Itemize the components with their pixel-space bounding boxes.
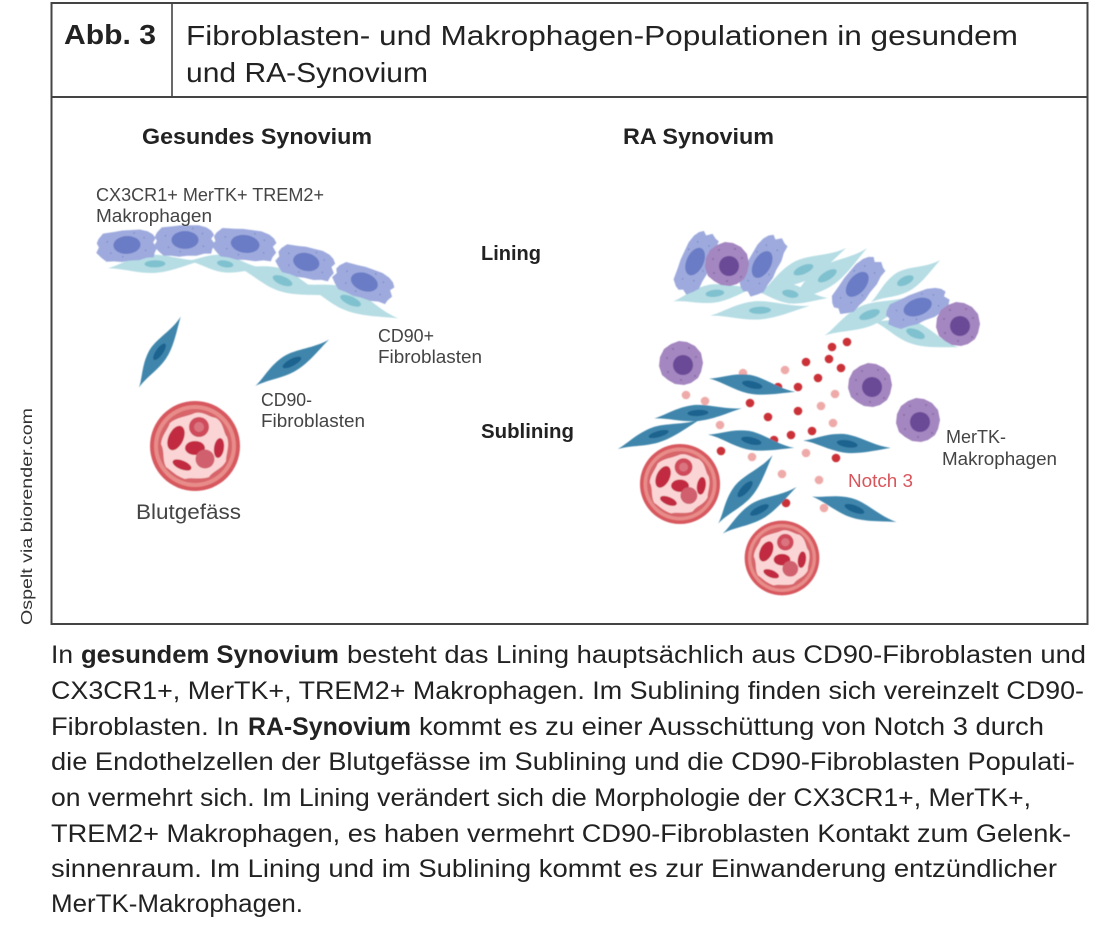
Notch 3 particles xyxy=(682,338,851,512)
body paragraph: sinnenraum. Im Lining und im Sublining kommt es zur Einwanderung entzündlicher xyxy=(51,856,1057,883)
label: CD90- fibroblasts: CD90- xyxy=(261,390,312,410)
body paragraph: In xyxy=(51,642,73,669)
label: CD90- fibroblasts: Fibroblasten xyxy=(261,411,365,431)
body paragraph: besteht das Lining hauptsächlich aus CD90-Fibroblasten und xyxy=(347,642,1086,669)
body paragraph: on vermehrt sich. Im Lining verändert sich die Morphologie der CX3CR1+, MerTK+, xyxy=(51,785,1031,812)
body paragraph: Fibroblasten. In xyxy=(51,714,239,741)
heading: RA synovium: RA Synovium xyxy=(623,124,774,149)
label: sublining: Sublining xyxy=(481,420,574,443)
figure frame xyxy=(51,3,1088,624)
healthy lining fibroblasts xyxy=(107,249,402,331)
body paragraph: kommt es zu einer Ausschüttung von Notch 3 durch xyxy=(419,714,1044,741)
MerTK- macrophages xyxy=(659,242,980,442)
body paragraph: RA-Synovium xyxy=(248,714,411,741)
RA sublining fibroblasts xyxy=(615,366,899,538)
label: CD90+ fibroblasts: CD90+ xyxy=(378,326,434,346)
RA lining macrophages xyxy=(668,226,954,334)
body paragraph: die Endothelzellen der Blutgefässe im Sublining und die CD90-Fibroblasten Populati- xyxy=(51,749,1075,776)
illustration: healthy synovium xyxy=(95,225,402,491)
label: CD90+ fibroblasts xyxy=(378,326,482,367)
RA blood vessels xyxy=(640,444,819,595)
RA lining fibroblasts xyxy=(672,241,961,361)
figure title: und RA-Synovium xyxy=(186,57,428,88)
label: CD90+ fibroblasts: Fibroblasten xyxy=(378,347,482,367)
healthy lining macrophages xyxy=(95,225,399,308)
label: CD90- fibroblasts xyxy=(261,390,365,431)
body paragraph xyxy=(51,642,1086,918)
label: Notch 3: Notch 3 xyxy=(848,470,913,491)
body paragraph: TREM2+ Makrophagen, es haben vermehrt CD90-Fibroblasten Kontakt zum Gelenk- xyxy=(51,821,1071,848)
label: MerTK- macrophages xyxy=(942,427,1057,469)
label: CX3CR1+ macrophages: CX3CR1+ MerTK+ TREM2+ xyxy=(96,185,324,205)
body paragraph: MerTK-Makrophagen. xyxy=(51,891,303,918)
icon: healthy blood vessel xyxy=(150,401,240,491)
label: CX3CR1+ macrophages xyxy=(96,185,324,226)
figure title: Fibroblasten- und Makrophagen-Populationen in gesundem xyxy=(186,20,1018,51)
figure number: Abb. 3 xyxy=(64,19,156,50)
label: blood vessel: Blutgefäss xyxy=(136,500,241,524)
heading: healthy synovium: Gesundes Synovium xyxy=(142,124,372,149)
figure title xyxy=(186,20,1018,88)
label: CX3CR1+ macrophages: Makrophagen xyxy=(96,206,212,226)
label: lining: Lining xyxy=(481,242,541,265)
body paragraph: CX3CR1+, MerTK+, TREM2+ Makrophagen. Im Sublining finden sich vereinzelt CD90- xyxy=(51,678,1084,705)
label: MerTK- macrophages: Makrophagen xyxy=(942,449,1057,469)
label: MerTK- macrophages: MerTK- xyxy=(946,427,1006,447)
image credit: Ospelt via biorender.com xyxy=(19,408,36,625)
body paragraph: gesundem Synovium xyxy=(81,642,339,669)
healthy CD90- fibroblasts xyxy=(128,313,335,391)
illustration: RA synovium xyxy=(615,226,980,595)
